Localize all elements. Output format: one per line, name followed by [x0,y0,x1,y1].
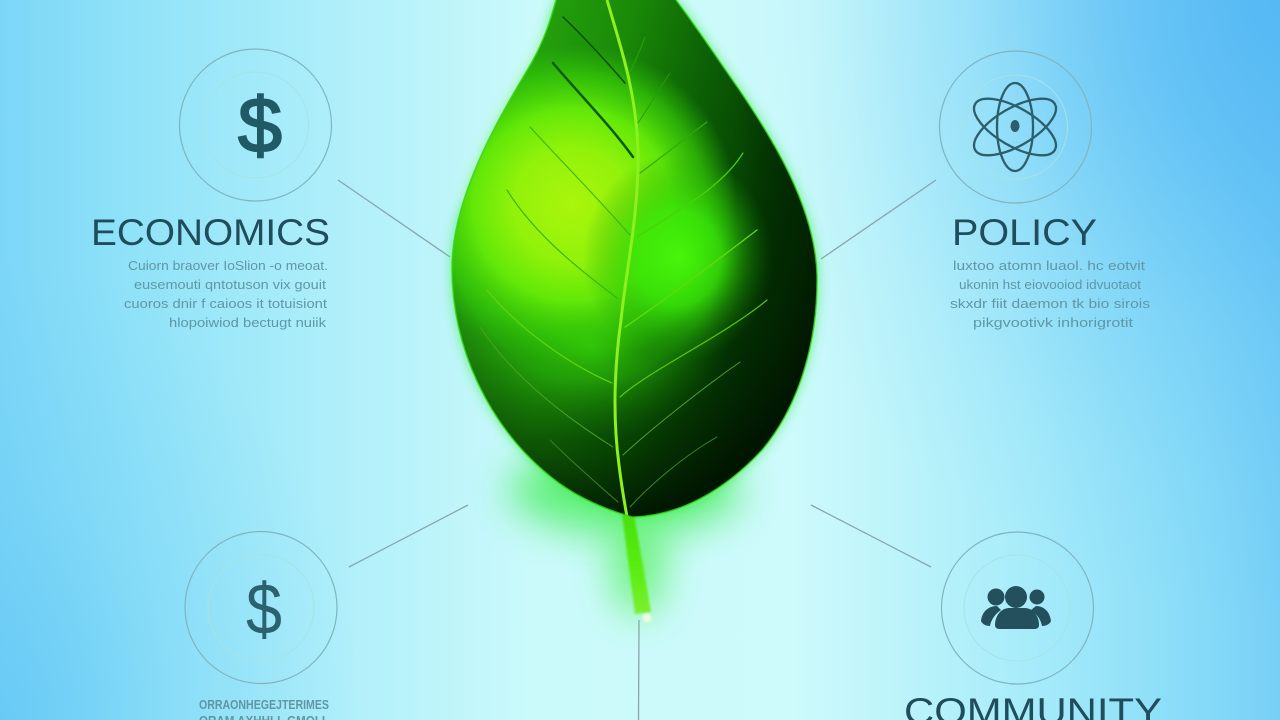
connector line: community [811,505,931,567]
body text: lower left: ORRAONHEGEJTERIMES [199,697,329,712]
body text: economics: cuoros dnir f caioos it totuisiont [124,296,327,311]
heading: economics: ECONOMICS [91,212,330,253]
body text: lower left [199,697,329,720]
connector line: lower left [349,505,468,567]
icon: people in circles [942,532,1094,684]
connector line: stem down [638,620,640,720]
body text: policy: ukonin hst eiovooiod idvuotaot [959,277,1141,292]
body text: policy: skxdr fiit daemon tk bio sirois [950,296,1151,311]
icon: dollar in circles [180,49,332,201]
icon: thin dollar in circles: $ [246,570,282,650]
connector line: policy [821,180,936,259]
heading: policy: POLICY [952,212,1097,253]
stem tip [642,614,652,622]
body text: economics: Cuiorn braover IoSlion -o meoat. [128,258,328,273]
body text: policy: luxtoo atomn luaol. hc eotvit [953,258,1145,273]
side veins [480,17,767,507]
body text: economics: eusemouti qntotuson vix gouit [134,277,326,292]
leaf rim [452,0,817,517]
leaf illustration [443,0,826,637]
body text: economics [124,258,328,330]
body text: policy [950,258,1151,330]
leaf stem [622,514,651,614]
panel: policy [940,51,1151,330]
midrib [607,0,638,517]
body text: economics: hlopoiwiod bectugt nuiik [169,315,327,330]
icon: atom in circles [940,51,1092,203]
leaf blade [452,0,817,517]
icon: dollar in circles: $ [238,81,282,169]
connector line: economics [338,180,450,257]
body text: policy: pikgvootivk inhorigrotit [973,315,1133,330]
panel: lower left [185,532,337,720]
panel: community [904,532,1162,720]
icon: thin dollar in circles [185,532,337,684]
leaf glow [452,0,817,615]
panel: economics [91,49,332,330]
